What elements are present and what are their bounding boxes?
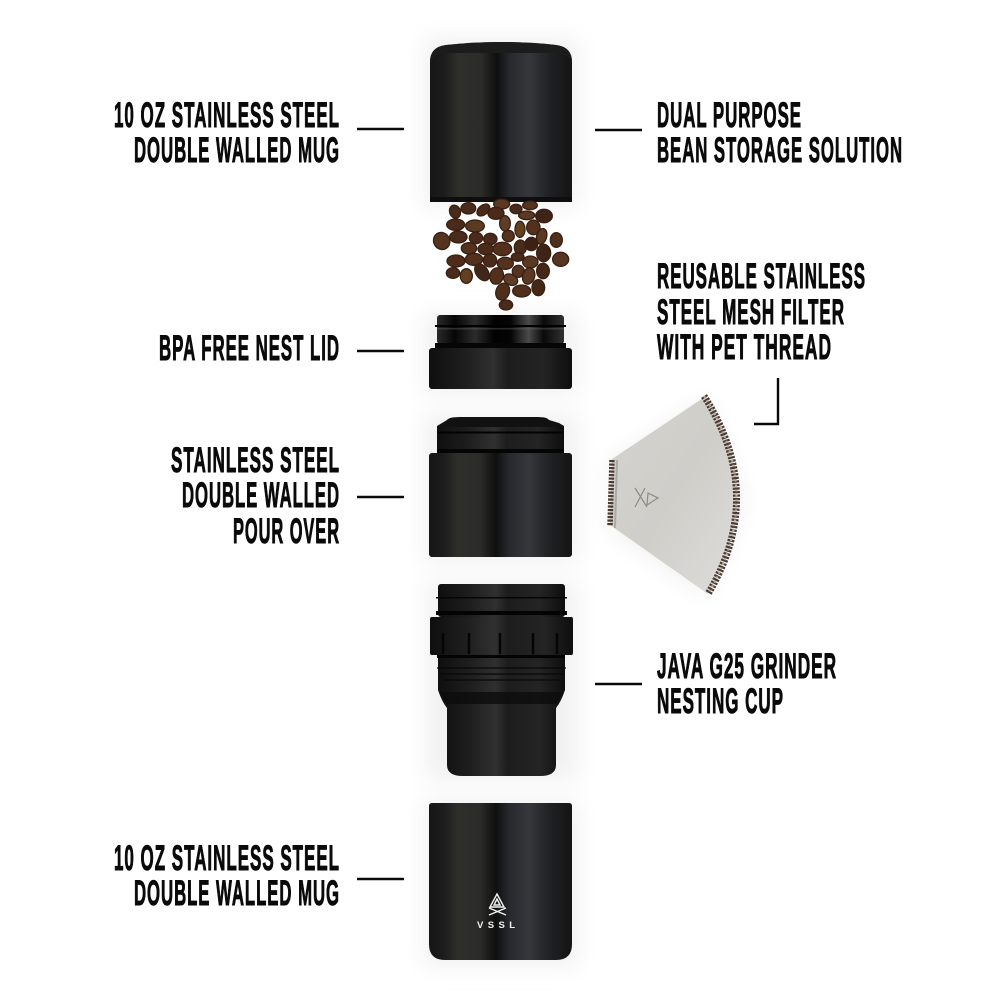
- text: STAINLESS STEEL: [171, 441, 340, 480]
- label: pour over: [171, 441, 340, 551]
- text: DOUBLE WALLED MUG: [134, 874, 340, 913]
- pour over: [429, 417, 572, 557]
- text: DOUBLE WALLED MUG: [134, 131, 340, 170]
- coffee beans: [430, 199, 569, 310]
- text: DOUBLE WALLED: [182, 476, 340, 515]
- grinder nesting cup: [430, 584, 573, 776]
- nest lid: [429, 315, 572, 389]
- icon: filter logo: [635, 488, 658, 507]
- text: 10 OZ STAINLESS STEEL: [114, 96, 340, 135]
- label: grinder: NESTING CUP: [657, 682, 784, 721]
- label: mesh filter: [657, 257, 866, 367]
- reusable mesh filter: [610, 396, 738, 594]
- label: bean storage: [657, 96, 903, 170]
- soft product shadows: [424, 38, 745, 966]
- label: grinder: [657, 647, 837, 721]
- label: mug top left: [114, 96, 340, 170]
- text: BPA FREE NEST LID: [159, 329, 340, 368]
- text: POUR OVER: [233, 512, 340, 551]
- icon: VSSL logo: VSSL: [477, 920, 518, 931]
- text: 10 OZ STAINLESS STEEL: [114, 839, 340, 878]
- mug: bottom with logo: [429, 803, 572, 960]
- mug: top: [430, 42, 572, 202]
- icon: VSSL logo: [477, 894, 518, 931]
- label: bean storage: DUAL PURPOSE: [657, 96, 802, 135]
- leader lines: [357, 129, 778, 879]
- label: mug bottom: [114, 839, 340, 913]
- label: mesh filter: WITH PET THREAD: [657, 328, 832, 367]
